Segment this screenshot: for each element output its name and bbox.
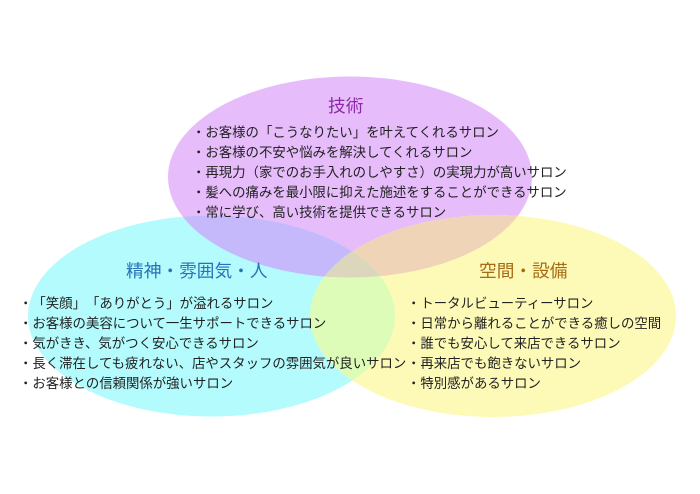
overlap: technique and spirit [183,216,352,276]
list: technique [192,125,567,220]
venn diagram [28,76,676,417]
overlap: spirit and space [310,252,395,380]
circle: spirit [28,216,395,416]
heading: spirit, atmosphere, people: 精神・雰囲気・人 [126,261,268,281]
list: space and equipment: ・トータルビューティーサロン [407,296,593,310]
list: space and equipment: ・特別感があるサロン [407,376,541,390]
list: technique: ・髪への痛みを最小限に抑えた施述をすることができるサロン [192,185,567,200]
list: spirit, atmosphere, people: ・「笑顔」「ありがとう」が溢れるサロン [19,296,273,310]
heading: space and equipment: 空間・設備 [479,261,567,281]
list: space and equipment [407,296,661,390]
list: space and equipment: ・誰でも安心して来店できるサロン [407,336,621,350]
list: technique: ・お客様の「こうなりたい」を叶えてくれるサロン [192,125,499,140]
circle: space [310,215,676,417]
list: technique: ・お客様の不安や悩みを解決してくれるサロン [192,145,472,160]
overlap: technique and space [324,215,518,276]
list: spirit, atmosphere, people: ・お客様との信頼関係が強いサロン [19,376,233,390]
list: spirit, atmosphere, people: ・気がきき、気がつく安心できるサロン [19,336,259,350]
overlap: all three [325,252,380,278]
list: spirit, atmosphere, people: ・長く滞在しても疲れない、店やスタッフの雰囲気が良いサロン [19,356,406,370]
list: spirit, atmosphere, people: ・お客様の美容について一生サポートできるサロン [19,316,326,330]
list: space and equipment: ・日常から離れることができる癒しの空間 [407,316,661,330]
list: technique: ・再現力（家でのお手入れのしやすさ）の実現力が高いサロン [192,165,567,180]
list: space and equipment: ・再来店でも飽きないサロン [407,356,581,370]
circle: technique [168,76,532,278]
list: technique: ・常に学び、高い技術を提供できるサロン [192,205,446,220]
list: spirit, atmosphere, people [19,296,406,390]
heading: technique: 技術 [328,96,363,116]
